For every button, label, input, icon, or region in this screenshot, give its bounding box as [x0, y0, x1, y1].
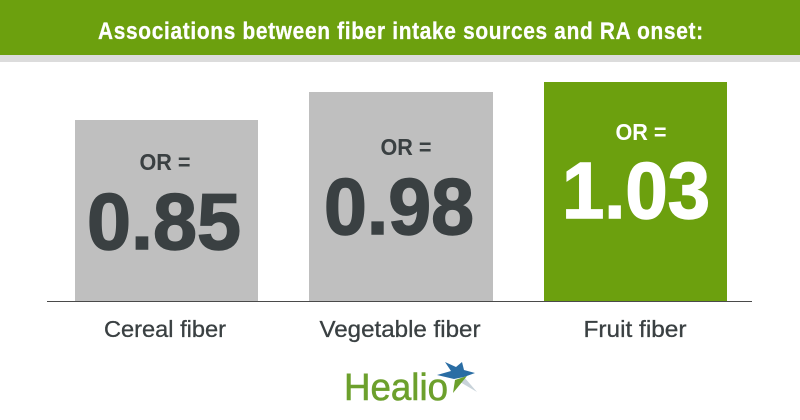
category label: vegetable fiber: Vegetable fiber	[320, 316, 481, 342]
bar: cereal fiber	[75, 120, 258, 301]
bar: fruit fiber	[544, 82, 727, 301]
label: OR fruit: OR =	[616, 119, 666, 145]
label: OR vegetable: OR =	[380, 134, 432, 160]
value: 1.03: 1.03	[562, 146, 710, 235]
baseline	[47, 301, 752, 302]
value: 0.85: 0.85	[87, 177, 241, 266]
label: OR cereal: OR =	[140, 149, 190, 175]
logo wordmark: Healio	[344, 367, 448, 409]
value: 0.98: 0.98	[324, 162, 474, 251]
logo star icon	[437, 362, 477, 393]
Healio logo	[344, 362, 477, 409]
bar: vegetable fiber	[309, 92, 493, 301]
category label: cereal fiber: Cereal fiber	[104, 316, 226, 342]
header banner	[0, 0, 800, 62]
title: Associations between fiber intake sources and RA onset:	[98, 18, 704, 44]
category label: fruit fiber: Fruit fiber	[584, 316, 687, 342]
